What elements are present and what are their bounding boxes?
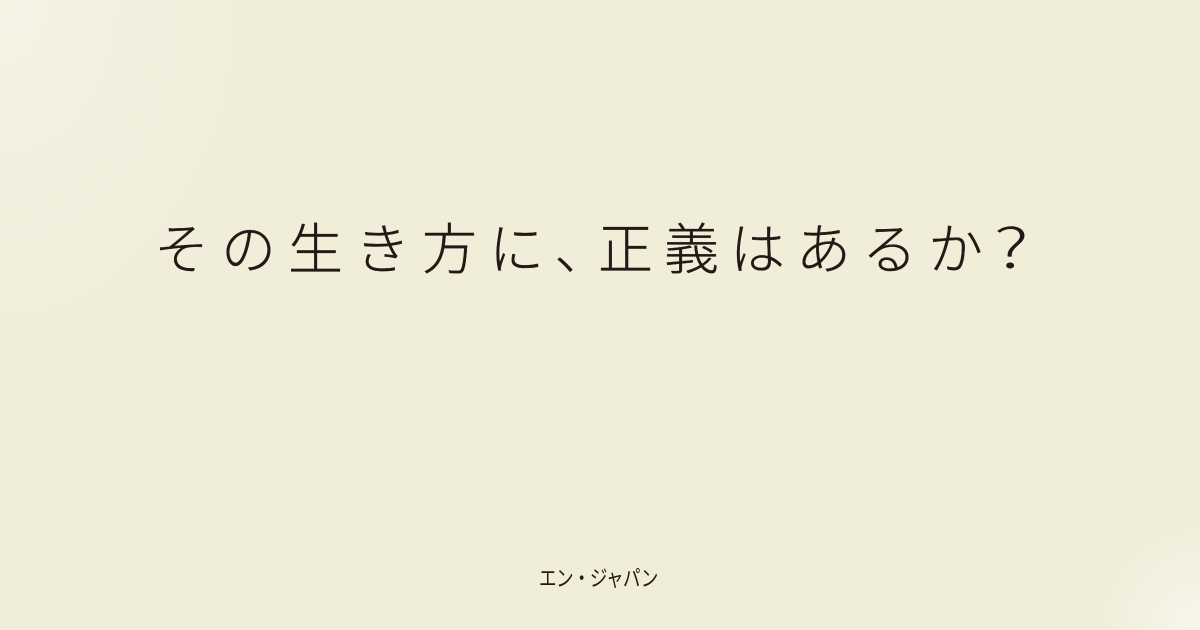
title: ? [994,204,1029,284]
title: その生き方に、 [154,205,621,285]
title [154,204,1029,285]
title: 正義はあるか [598,205,994,285]
brand name: エン・ジャパン [539,561,658,593]
